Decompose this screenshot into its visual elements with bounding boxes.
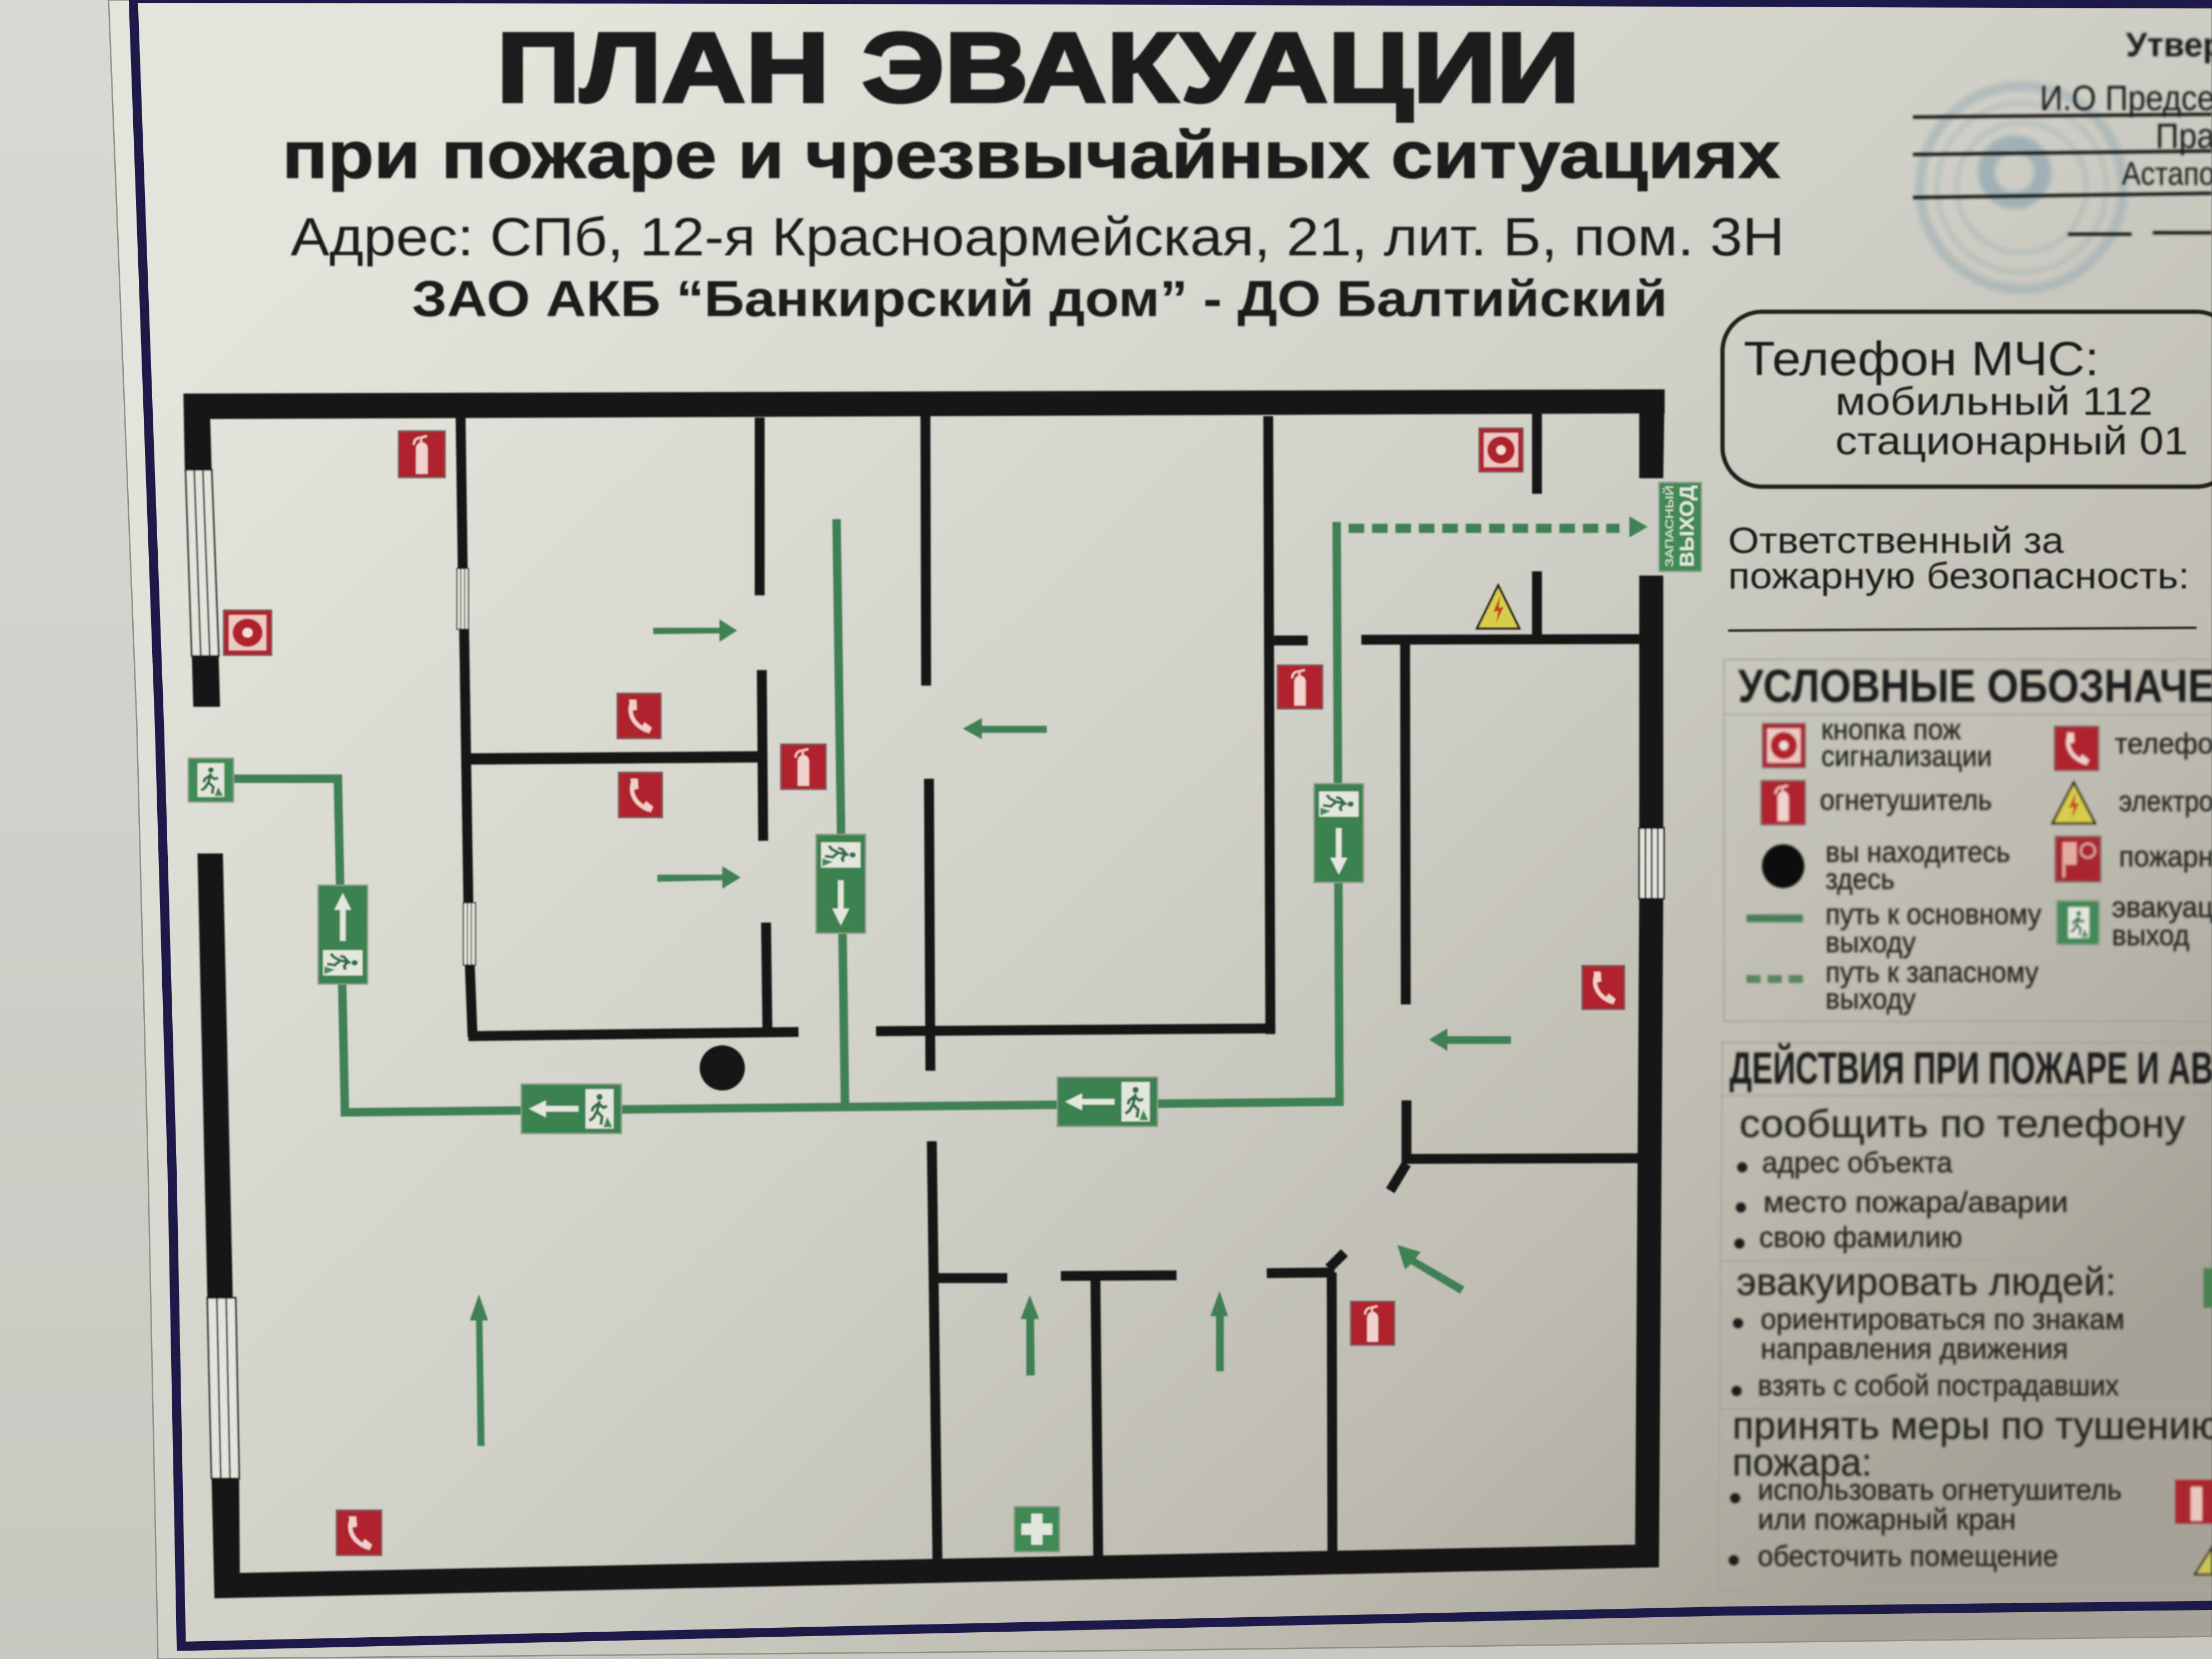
plate navy top border [128, 0, 2212, 8]
signature line [1728, 628, 2196, 630]
address: Адрес: СПб, 12-я Красноармейская, 21, лит. Б, пом. 3Н [290, 207, 1784, 267]
outer walls [183, 389, 1665, 1598]
icon: extinguisher centre [781, 744, 826, 789]
interior walls [460, 413, 1639, 1559]
windows [186, 470, 1664, 1478]
phone heading: Телефон МЧС: [1744, 332, 2099, 386]
landline number: стационарный 01 [1835, 419, 2188, 463]
floor plan [183, 389, 1701, 1598]
actions frame [1718, 1042, 2212, 1590]
item: incident location: место пожара/аварии [1763, 1186, 2068, 1218]
item: take victims: взять с собой пострадавших [1758, 1369, 2119, 1401]
organisation: ЗАО АКБ “Банкирский дом” - ДО Балтийский [412, 271, 1667, 327]
legend text: you are here line 2: здесь [1826, 862, 1895, 895]
item: follow signs line 2: направления движения [1760, 1332, 2068, 1365]
icon: extinguisher top [399, 431, 445, 478]
icon: extinguisher corridor [1277, 665, 1322, 709]
legend: fire hose [2055, 837, 2101, 882]
responsible text line 2: пожарную безопасность: [1728, 555, 2190, 596]
arrow up large room [470, 1294, 488, 1446]
arrow right lower [657, 866, 741, 889]
arrow up room 3 [1210, 1291, 1228, 1371]
approval block [1913, 26, 2212, 234]
legend: exit sign [2057, 901, 2099, 944]
direction sign down right [1314, 784, 1364, 882]
icon: extinguisher lower right [1351, 1301, 1395, 1345]
legend text: alarm button line 1: кнопка пож [1821, 713, 1961, 745]
legend: alarm button [1763, 724, 1805, 768]
direction sign left [521, 1084, 622, 1133]
phone box [1723, 312, 2212, 487]
icon: phone right room [1582, 966, 1624, 1010]
main route [233, 522, 1340, 1112]
item: surname: свою фамилию [1759, 1221, 1962, 1253]
action: extinguish line 2: пожара: [1733, 1440, 1872, 1484]
subtitle: при пожаре и чрезвычайных ситуациях [282, 118, 1781, 192]
phone box frame [1723, 312, 2212, 487]
legend: you are here [1762, 845, 1804, 888]
item: use extinguisher line 2: или пожарный кран [1758, 1503, 2016, 1535]
icon: first aid [1015, 1507, 1059, 1552]
responsible person [1728, 520, 2196, 630]
icon: phone room 1 [617, 693, 661, 739]
arrow diagonal [1398, 1245, 1464, 1294]
legend text: main route line 1: путь к основному [1826, 898, 2041, 930]
legend: extinguisher [1761, 781, 1805, 824]
legend panel [1724, 659, 2212, 1021]
legend: main route [1747, 917, 1803, 920]
legend: reserve route [1747, 977, 1803, 981]
item: cut power: обесточить помещение [1758, 1540, 2058, 1572]
reserve exit sign: ВЫХОД [1676, 486, 1698, 567]
legend text: alarm button line 2: сигнализации [1821, 740, 1992, 772]
legend text: extinguisher: огнетушитель [1820, 784, 1992, 816]
arrow right [653, 619, 737, 642]
reserve exit dashed route [1348, 516, 1648, 537]
title: ПЛАН ЭВАКУАЦИИ [497, 12, 1580, 123]
icon: exit sign partial [2204, 1268, 2212, 1308]
arrow left centre [963, 718, 1047, 739]
legend text: exit line 2: выход [2112, 919, 2190, 952]
icon: electrical warning [1477, 585, 1519, 628]
legend text: you are here line 1: вы находитесь [1826, 836, 2010, 868]
direction sign down centre [816, 835, 866, 933]
icon: warning partial [2195, 1548, 2212, 1574]
item: follow signs line 1: ориентироваться по знакам [1760, 1303, 2124, 1335]
icon: phone room 2 [619, 773, 662, 817]
responsible text line 1: Ответственный за [1728, 520, 2064, 561]
actions panel [1718, 1042, 2212, 1590]
direction sign left right [1058, 1077, 1157, 1127]
icon: phone bottom left [337, 1510, 381, 1555]
title block [282, 12, 1784, 327]
icon: extinguisher partial [2175, 1480, 2212, 1524]
item: object address: адрес объекта [1762, 1146, 1953, 1178]
action: extinguish line 1: принять меры по тушению [1733, 1404, 2212, 1447]
legend: phone [2055, 726, 2098, 770]
stamp [1920, 86, 2123, 289]
icon: alarm button left [224, 610, 271, 655]
branch route [837, 519, 845, 1108]
direction arrows [470, 619, 1511, 1446]
icon: alarm button top right [1479, 428, 1523, 472]
signature rules [1913, 114, 2212, 234]
bullets [1729, 1162, 1747, 1565]
exit sign left [188, 758, 234, 802]
item: use extinguisher line 1: использовать огнетушитель [1758, 1473, 2122, 1506]
legend: electrical [2053, 783, 2095, 823]
evacuation routes [233, 519, 1340, 1112]
mobile number: мобильный 112 [1835, 380, 2153, 424]
legend text: reserve route line 1: путь к запасному [1826, 955, 2039, 988]
arrow left right room [1429, 1029, 1511, 1051]
you are here dot [700, 1045, 745, 1090]
arrow up room 2 [1021, 1295, 1039, 1375]
action: evacuate: эвакуировать людей: [1736, 1260, 2116, 1303]
reserve exit sign [1659, 482, 1701, 571]
direction sign up [318, 885, 367, 984]
legend text: main route line 2: выходу [1826, 926, 1916, 958]
legend text: reserve route line 2: выходу [1826, 982, 1916, 1015]
legend frame [1724, 659, 2212, 1021]
reserve exit sign: ЗАПАСНЫЙ [1662, 486, 1676, 567]
action: report by phone: сообщить по телефону [1739, 1102, 2185, 1146]
